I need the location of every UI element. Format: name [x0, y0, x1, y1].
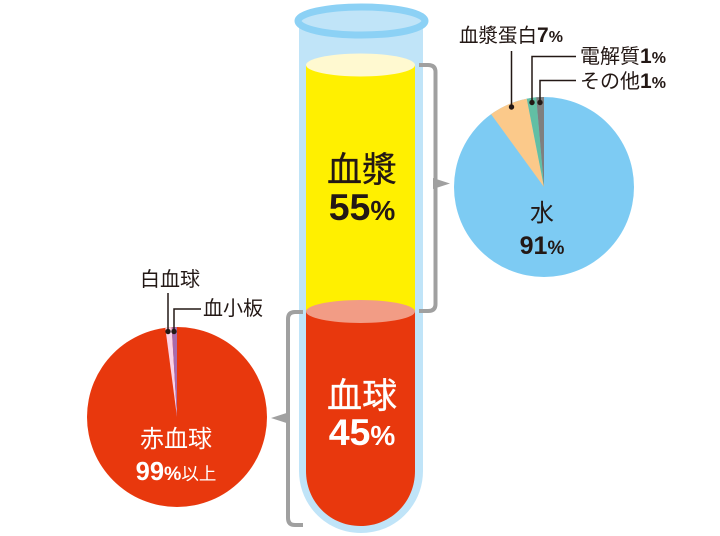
plasma layer: [306, 65, 415, 311]
slice: electrolytes 1%: [527, 97, 544, 187]
slice: other 1%: [536, 97, 544, 187]
slice: red blood cells: [87, 327, 267, 507]
bracket: blood cells: [288, 312, 303, 525]
label: white blood cells: 白血球: [140, 268, 200, 291]
leader: white blood cells: [165, 293, 171, 334]
leader: protein: [509, 51, 514, 110]
slice: protein 7%: [491, 99, 544, 187]
label: water: 水: [530, 200, 554, 227]
test tube: [298, 7, 425, 533]
label: red blood cells: 赤血球: [140, 426, 212, 453]
label: protein 7%: 血漿蛋白7%: [459, 24, 563, 47]
leader: electrolytes: [529, 56, 576, 105]
arrow: to blood cell pie: [271, 412, 288, 424]
plasma surface: [306, 54, 415, 76]
tube glass body: [299, 20, 423, 533]
blood cell layer: [306, 311, 415, 526]
blood cell surface: [306, 300, 415, 323]
pie chart: plasma: [454, 24, 666, 277]
bracket: plasma: [419, 65, 436, 311]
label: 91%: 91%: [520, 232, 564, 260]
label: 99% or more: 99%以上: [136, 458, 216, 486]
label: platelets: 血小板: [203, 297, 263, 320]
blood cell label: 血球: [327, 377, 397, 416]
leader: platelets: [171, 309, 201, 334]
leader: other: [537, 80, 576, 105]
plasma label: 血漿: [327, 151, 397, 190]
label: electrolytes 1%: 電解質1%: [580, 45, 666, 68]
slice: water: [454, 97, 634, 277]
tube rim: [298, 7, 425, 35]
slice: white blood cells: [165, 327, 177, 417]
arrow: to plasma pie: [433, 178, 450, 189]
label: other 1%: その他1%: [580, 70, 666, 93]
blood cell label: [327, 377, 397, 453]
plasma label: [327, 151, 397, 228]
slice: platelets: [172, 327, 177, 417]
blood cell label: 45%: [329, 411, 395, 453]
pie chart: blood cells: [87, 268, 267, 507]
plasma label: 55%: [329, 186, 395, 228]
